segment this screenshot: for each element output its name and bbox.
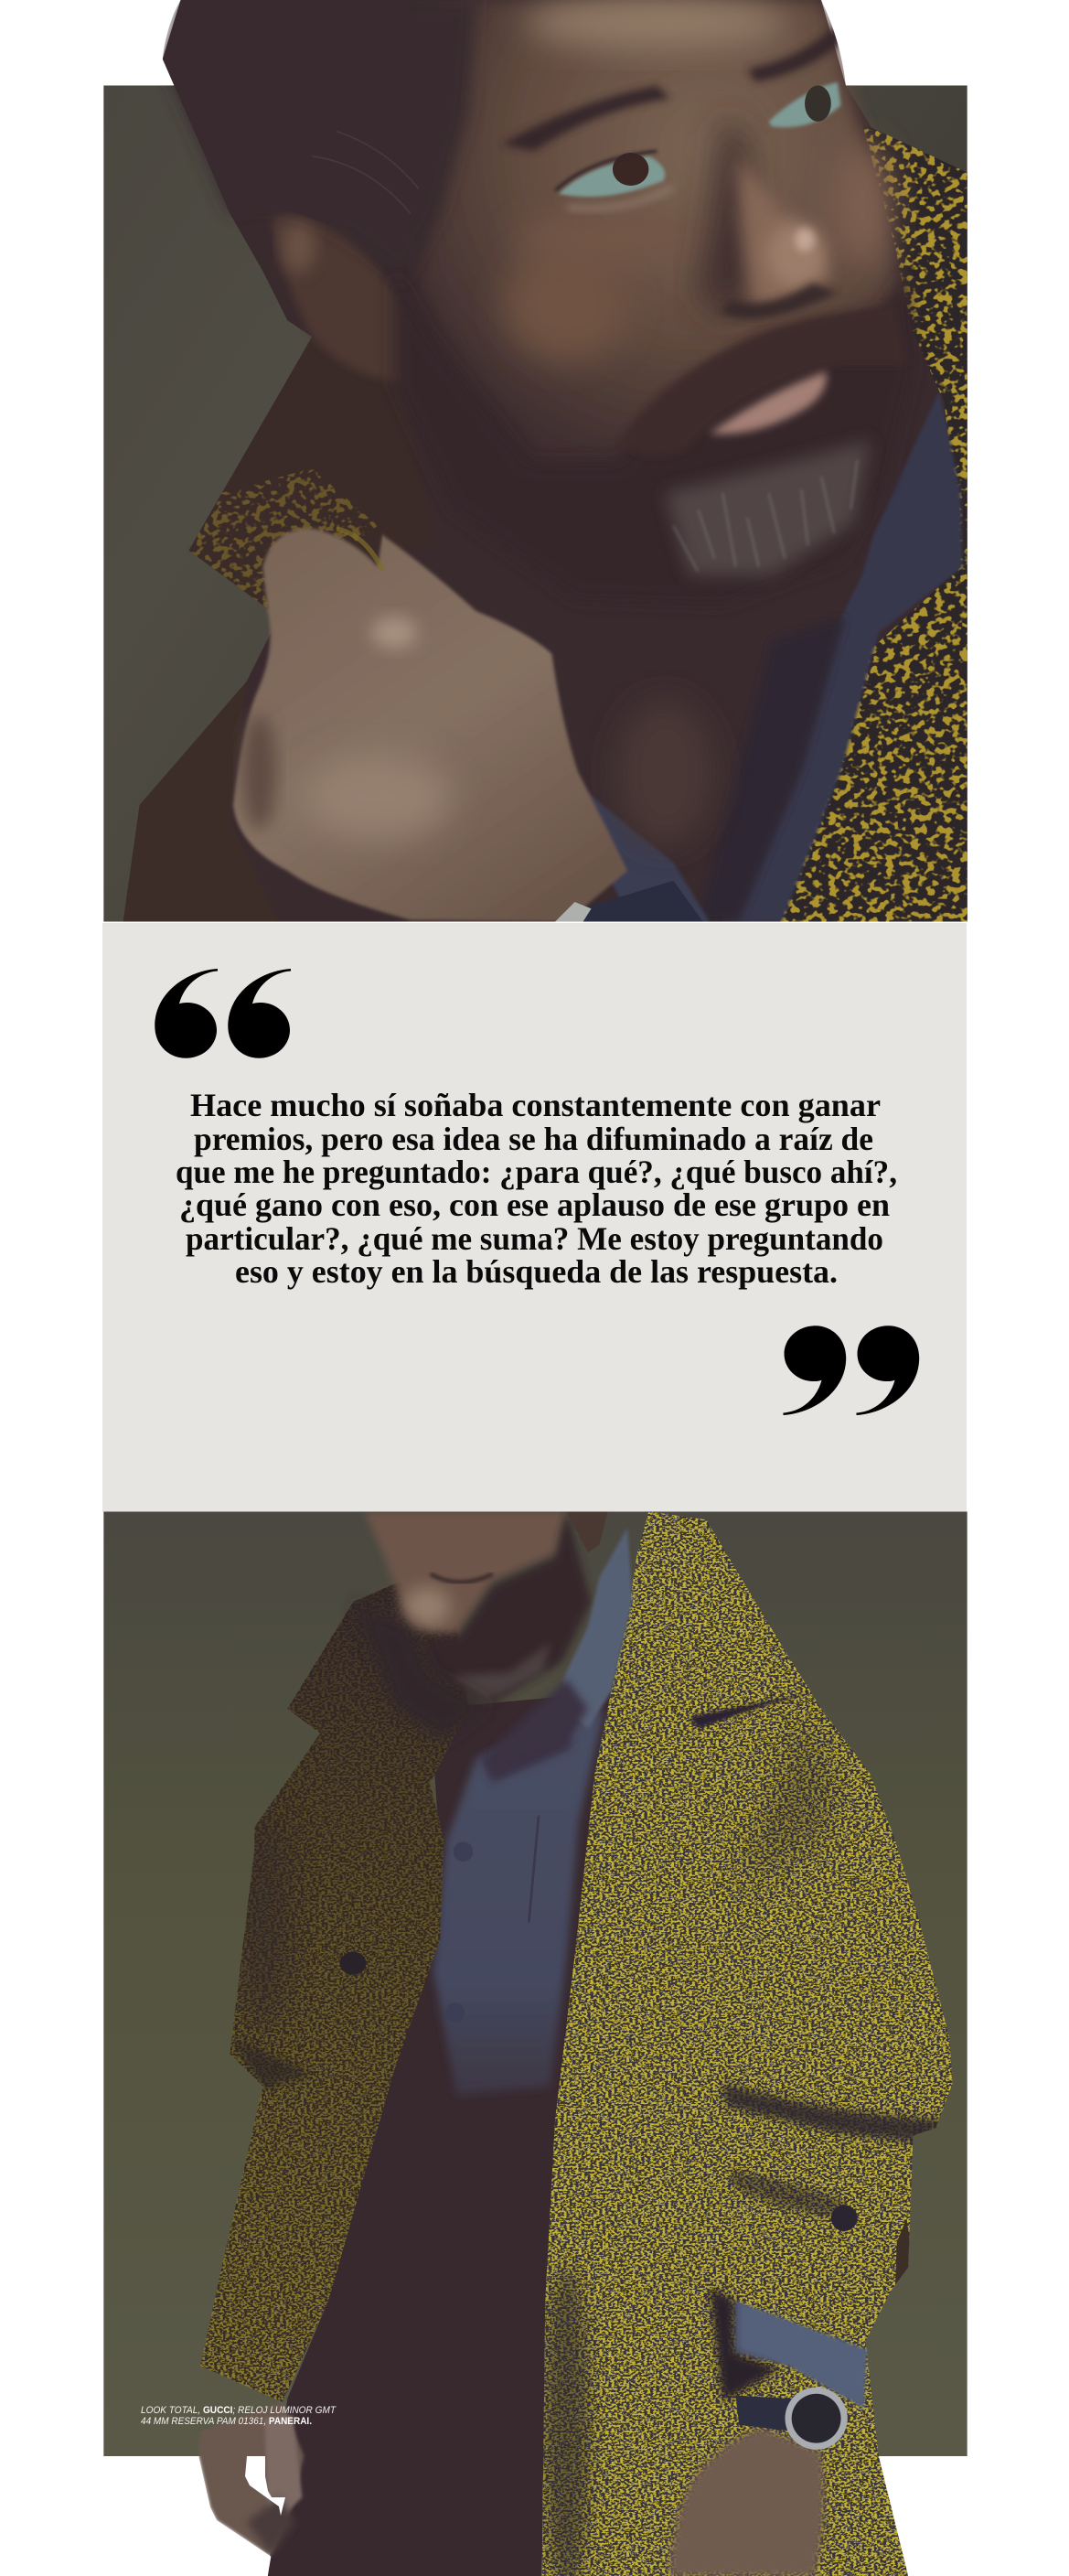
- beard: [394, 271, 914, 605]
- photo: portrait close-up with hand at collar: [103, 0, 967, 922]
- caption: [141, 2405, 337, 2427]
- coat: right yellow speckled panel: [780, 123, 967, 922]
- right eye: [747, 23, 846, 127]
- lips: [710, 371, 827, 435]
- gap between fingers: [245, 2456, 285, 2516]
- quote text: premios, pero esa idea se ha difuminado a raíz de: [194, 1121, 873, 1157]
- quote text: ¿qué gano con eso, con ese aplauso de ese grupo en: [179, 1186, 890, 1223]
- quote text: Hace mucho sí soñaba constantemente con ganar: [190, 1087, 881, 1123]
- right hand: [668, 2428, 824, 2576]
- quote panel: [102, 923, 967, 1512]
- head looking down: [353, 1511, 608, 1742]
- quote text: eso y estoy en la búsqueda de las respuesta.: [235, 1253, 838, 1290]
- sleeve fold: [722, 2083, 946, 2144]
- shirt collar: [563, 1528, 632, 1728]
- lapel shadow: [690, 1692, 813, 1728]
- coat: left panel: [198, 1552, 476, 2407]
- left hand: [198, 2402, 304, 2557]
- body and trousers: [268, 1692, 611, 2576]
- hand at collar: [233, 529, 627, 922]
- wristwatch: [736, 2388, 848, 2450]
- photo: full coat looking down: [103, 1511, 967, 2576]
- ear: [271, 213, 397, 380]
- left eye: [501, 85, 673, 209]
- coat: right bright panel: [534, 1511, 961, 2576]
- icon: closing quotation marks: [783, 1326, 919, 1415]
- hair: [163, 0, 479, 229]
- nose: [698, 115, 838, 320]
- quote text: que me he preguntado: ¿para qué?, ¿qué busco ahí?,: [176, 1154, 897, 1190]
- quote text: particular?, ¿qué me suma? Me estoy preguntando: [186, 1220, 883, 1257]
- face skin: [419, 0, 903, 460]
- quote text: [176, 1087, 897, 1290]
- icon: opening quotation marks: [155, 969, 291, 1058]
- figure base: [123, 0, 967, 922]
- caption: 44 MM RESERVA PAM 01361, PANERAI.: [141, 2416, 312, 2427]
- watch strap: [555, 881, 703, 922]
- coat: left collar: [126, 343, 378, 902]
- shirt collar and placket: [583, 391, 962, 922]
- shirt cuff: [734, 2300, 867, 2409]
- neck shadow glow: [616, 698, 714, 846]
- shirt: [433, 1709, 604, 2095]
- caption: LOOK TOTAL, GUCCI; RELOJ LUMINOR GMT: [141, 2405, 337, 2416]
